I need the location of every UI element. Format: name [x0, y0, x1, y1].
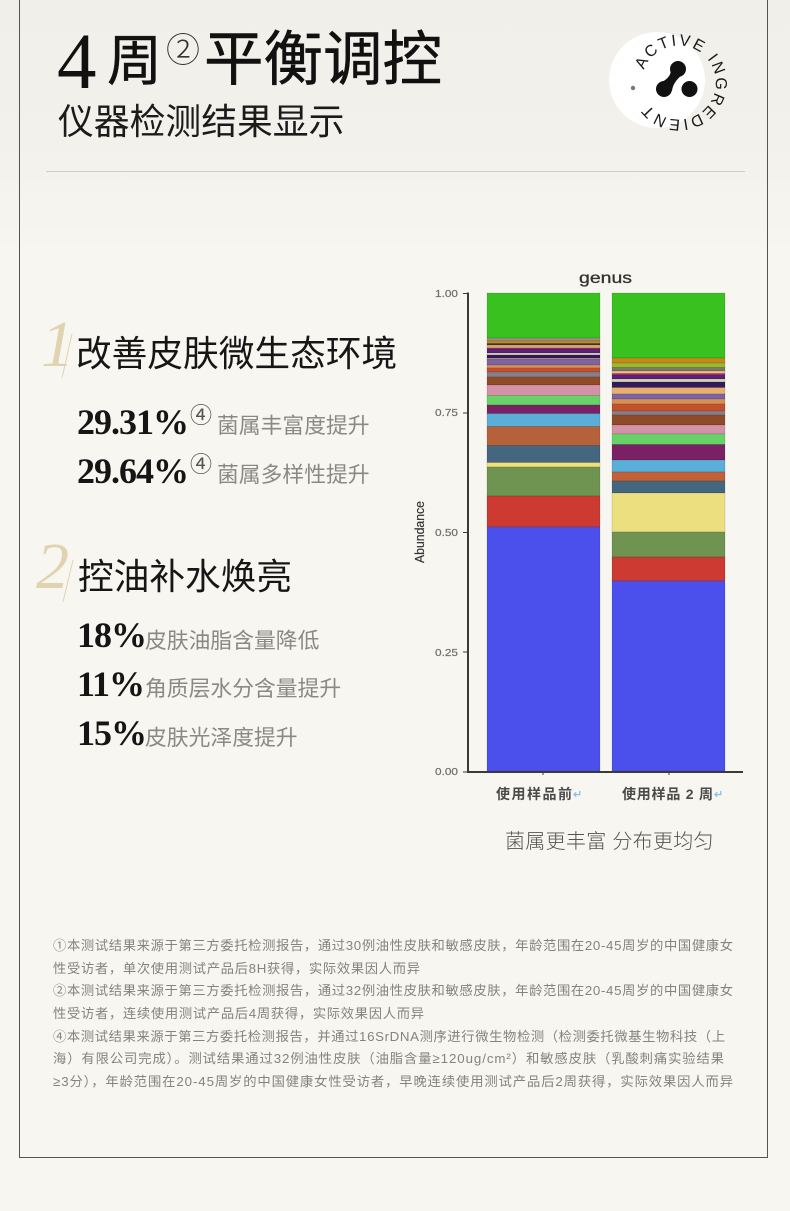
stat: richness value: 29.31% — [77, 402, 188, 442]
badge ring text: ACTIVE INGREDIENT — [636, 34, 727, 131]
footnote 4: ④本测试结果来源于第三方委托检测报告，并通过16SrDNA测序进行微生物检测（检测委托微基生物科技（上 — [53, 1028, 725, 1044]
bar: before use — [487, 293, 600, 771]
footnote 4 second line: 海）有限公司完成）。测试结果通过32例油性皮肤（油脂含量≥120ug/cm²）和敏感皮肤（乳酸刺痛实验结果 — [53, 1050, 724, 1066]
stat: water label: 角质层水分含量提升 — [145, 676, 341, 701]
y axis label: Abundance — [412, 501, 427, 563]
footnote 2 continued: 性受访者，连续使用测试产品后4周获得，实际效果因人而异 — [53, 1005, 424, 1021]
numeral slash — [62, 334, 72, 378]
y axis ticks: 0.00 — [435, 766, 458, 778]
x axis labels: 使用样品 2 周 — [622, 786, 713, 802]
stacked bar chart — [412, 270, 743, 802]
divider — [46, 171, 745, 172]
bar: after two weeks — [612, 293, 725, 771]
stat: shine label: 皮肤光泽度提升 — [145, 725, 298, 750]
icon: molecule — [656, 61, 698, 97]
stat: water value: 11% — [77, 664, 144, 704]
footnote 1: ①本测试结果来源于第三方委托检测报告，通过30例油性皮肤和敏感皮肤，年龄范围在20-45周岁的中国健康女 — [53, 937, 733, 953]
footnote 1 continued: 性受访者，单次使用测试产品后8H获得，实际效果因人而异 — [53, 960, 420, 976]
title block — [57, 19, 442, 142]
x axis labels: 使用样品前 — [496, 786, 572, 802]
stat: diversity marker: ④ — [190, 452, 212, 477]
subtitle: 仪器检测结果显示 — [58, 102, 344, 142]
title: balance control: 平衡调控 — [204, 26, 442, 93]
chart caption: 菌属更丰富 分布更均匀 — [505, 831, 714, 853]
chart title: genus — [579, 270, 632, 287]
heading: oil and hydration: 控油补水焕亮 — [78, 557, 292, 597]
y axis ticks — [435, 288, 458, 778]
title: week character: 周 — [107, 30, 162, 92]
numeral 2: 2 — [36, 530, 69, 603]
y axis ticks: 0.50 — [435, 527, 458, 539]
panel: microbiome — [41, 308, 397, 491]
footnote 2: ②本测试结果来源于第三方委托检测报告，通过32例油性皮肤和敏感皮肤，年龄范围在20-45周岁的中国健康女 — [53, 982, 733, 998]
stat: shine value: 15% — [77, 713, 146, 753]
stat: diversity value: 29.64% — [77, 451, 188, 491]
title: numeral 4: 4 — [57, 19, 96, 106]
y axis ticks: 0.25 — [435, 647, 458, 659]
footnote 4 third line: ≥3分），年龄范围在20-45周岁的中国健康女性受访者，早晚连续使用测试产品后2周获得，实际效果因人而异 — [53, 1073, 733, 1089]
x axis labels: ↵ — [573, 789, 582, 801]
panel: oil and hydration — [36, 530, 341, 753]
stat: richness label: 菌属丰富度提升 — [217, 413, 370, 438]
y axis ticks: 0.75 — [435, 407, 458, 419]
x axis labels — [496, 786, 723, 802]
x axis labels: ↵ — [714, 789, 723, 801]
stat: oil label: 皮肤油脂含量降低 — [145, 628, 319, 653]
numeral 1: 1 — [41, 308, 74, 381]
stat: diversity label: 菌属多样性提升 — [217, 462, 370, 487]
title: footnote marker 2: ② — [166, 32, 200, 70]
footnotes — [53, 937, 733, 1089]
stat: richness marker: ④ — [190, 403, 212, 428]
y axis ticks: 1.00 — [435, 288, 458, 300]
axes — [463, 292, 743, 775]
heading: microbiome: 改善皮肤微生态环境 — [76, 334, 397, 374]
numeral slash — [62, 560, 74, 602]
badge: active ingredient — [609, 32, 727, 131]
stat: oil value: 18% — [77, 615, 146, 655]
badge dot — [631, 86, 635, 90]
